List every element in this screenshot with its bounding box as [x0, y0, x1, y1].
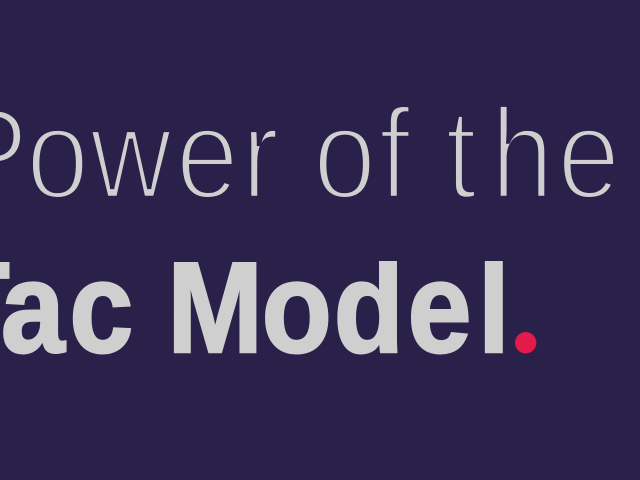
- red period dot: [515, 332, 536, 353]
- title graphic: [0, 106, 614, 354]
